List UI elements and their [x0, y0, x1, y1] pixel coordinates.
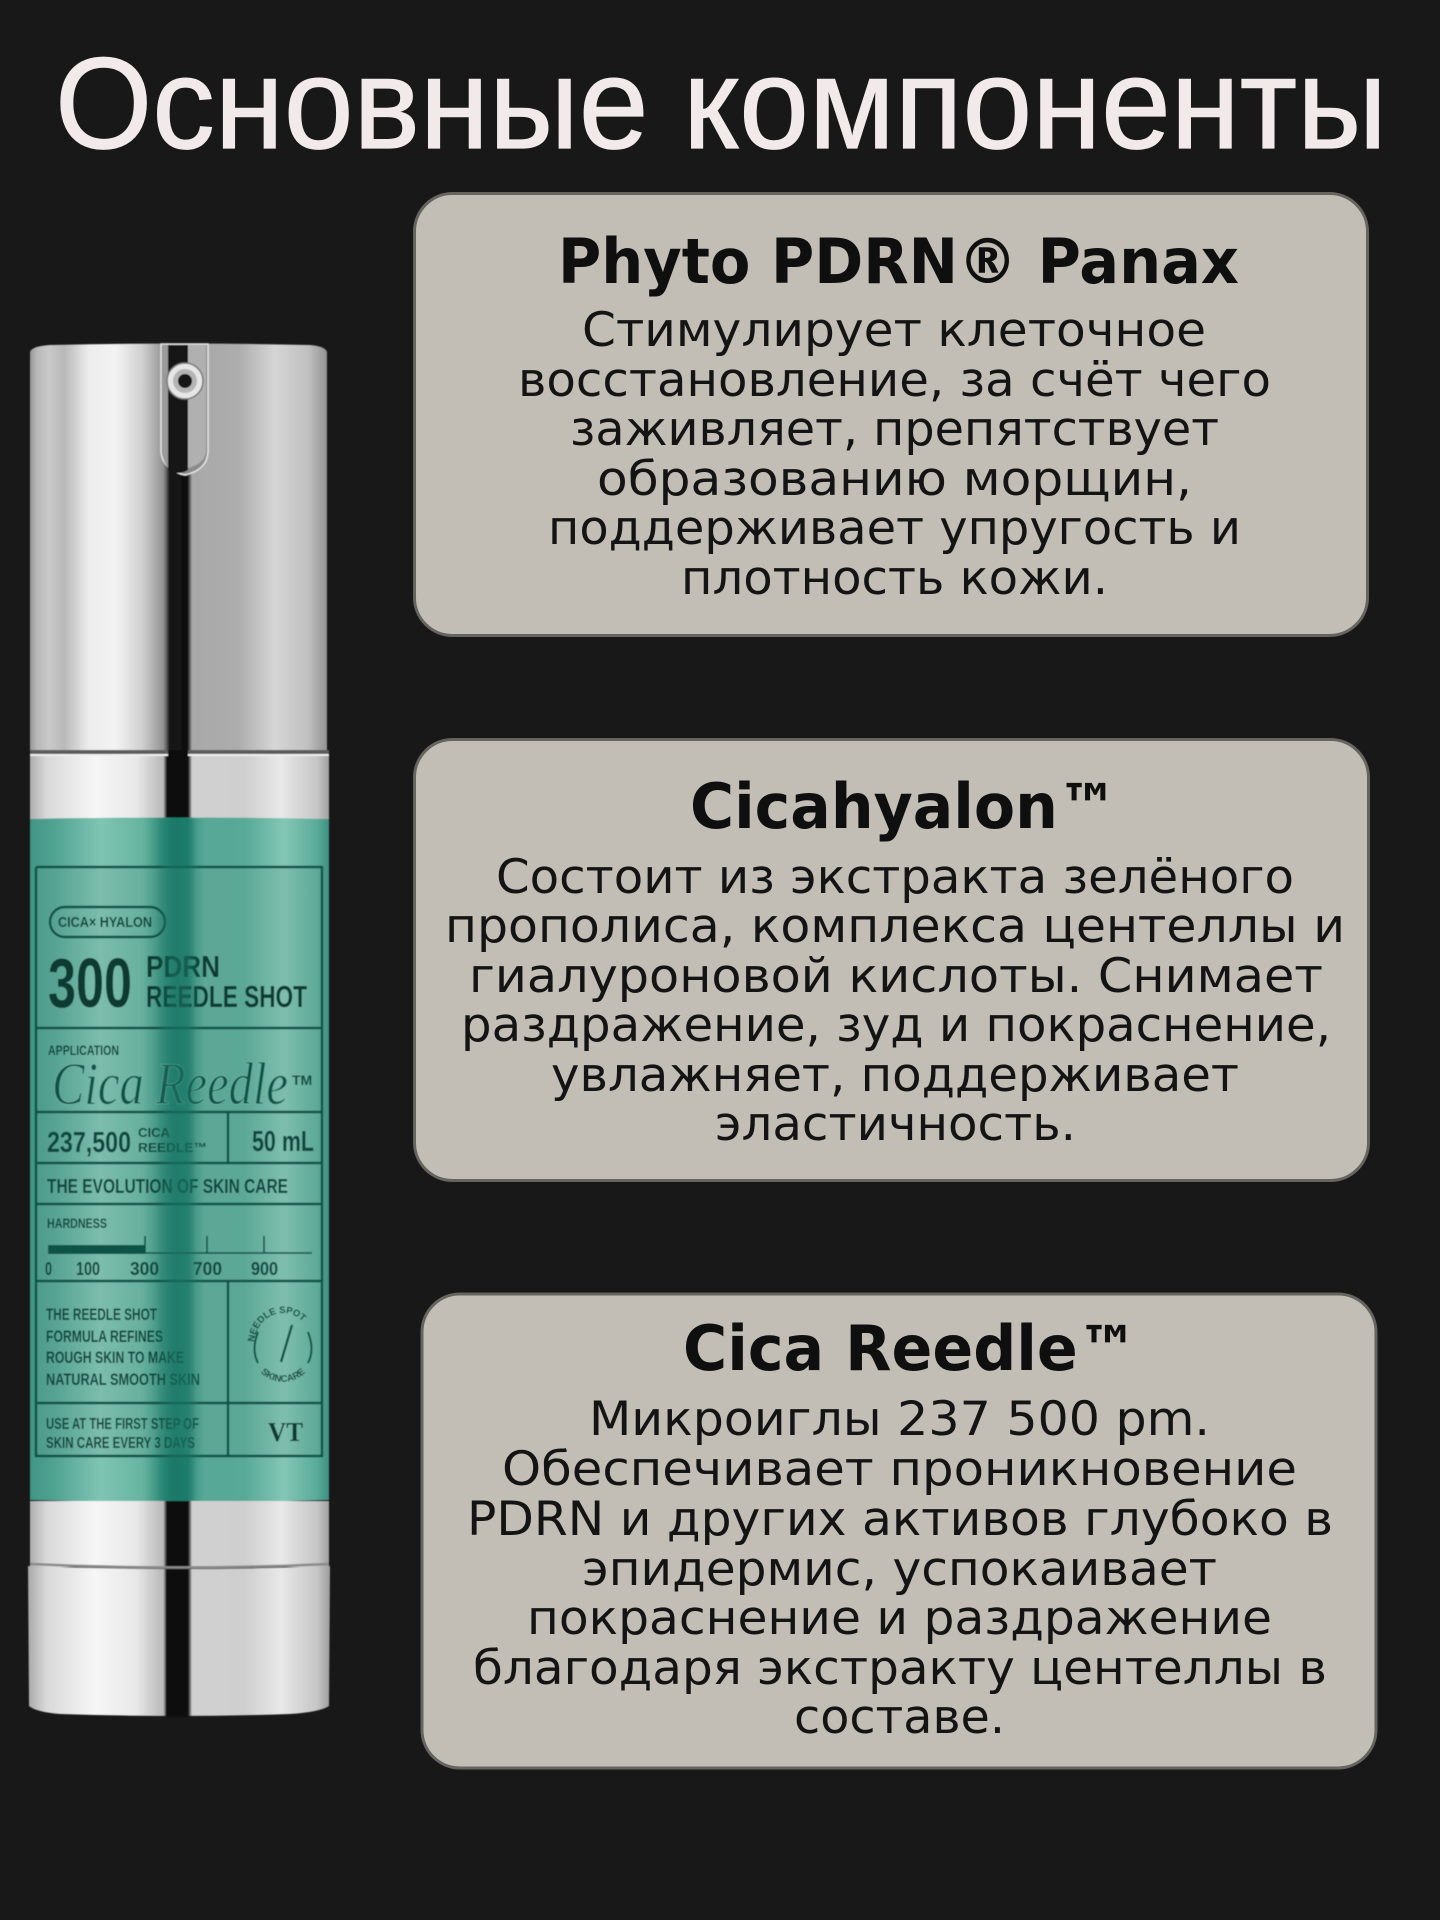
hardness scale: 100	[76, 1259, 100, 1279]
formula description: FORMULA REFINES	[46, 1327, 163, 1346]
pump nozzle	[167, 363, 203, 399]
usage note: SKIN CARE EVERY 3 DAYS	[46, 1435, 195, 1452]
formula description: THE REEDLE SHOT	[46, 1305, 157, 1324]
needle count and volume: CICA	[138, 1125, 171, 1140]
formula description: ROUGH SKIN TO MAKE	[46, 1348, 184, 1367]
needle count and volume: REEDLE™	[138, 1140, 207, 1155]
label grid	[36, 867, 322, 1456]
lower collar and base	[28, 1501, 330, 1717]
needle count and volume: 50 mL	[252, 1126, 314, 1158]
title: Основные компоненты	[55, 30, 1387, 176]
text block: Cicahyalon description: увлажняет, поддерживает	[551, 1048, 1239, 1103]
text block: Cica Reedle description: покраснение и раздражение	[527, 1591, 1272, 1646]
text block: Phyto PDRN description	[518, 303, 1271, 606]
text block: Cicahyalon description: прополиса, комплекса центеллы и	[445, 899, 1345, 954]
text block: Cicahyalon description: раздражение, зуд и покраснение,	[461, 998, 1331, 1053]
green label body	[29, 816, 330, 1502]
text block: Cica Reedle description	[467, 1392, 1333, 1745]
round badge: SKINCARE	[261, 1368, 306, 1382]
panel: Phyto PDRN Panax	[414, 194, 1368, 636]
heading: Cicahyalon: Cicahyalon™	[690, 770, 1118, 843]
application script: Cica Reedle	[52, 1051, 288, 1117]
product name	[48, 944, 307, 1022]
text block: Phyto PDRN description: поддерживает упругость и	[548, 501, 1241, 556]
text block: Cica Reedle description: благодаря экстракту центеллы в	[473, 1641, 1327, 1696]
hardness scale: 700	[193, 1259, 222, 1279]
hardness scale: 300	[130, 1259, 159, 1279]
text block: Cica Reedle description: эпидермис, успокаивает	[582, 1542, 1217, 1597]
text block: Cica Reedle description: составе.	[794, 1690, 1005, 1745]
text block: Phyto PDRN description: заживляет, препятствует	[570, 402, 1219, 457]
heading: Cica Reedle: Cica Reedle™	[683, 1312, 1138, 1385]
text block: Cica Reedle description: Микроиглы 237 500 pm.	[589, 1392, 1210, 1447]
product name: 300	[48, 944, 132, 1022]
slogan: THE EVOLUTION OF SKIN CARE	[47, 1176, 288, 1198]
product image: serum bottle	[27, 342, 331, 1717]
panel: Cicahyalon	[414, 740, 1368, 1180]
hardness scale	[45, 1215, 312, 1279]
hardness scale: 900	[251, 1259, 278, 1279]
usage note	[46, 1416, 199, 1452]
hardness scale: 0	[45, 1259, 52, 1279]
round badge	[247, 1306, 313, 1382]
text block: Cicahyalon description: эластичность.	[715, 1097, 1076, 1152]
round badge: NEEDLE SPOT	[247, 1306, 308, 1342]
upper collar	[30, 750, 329, 819]
text block: Phyto PDRN description: восстановление, за счёт чего	[518, 353, 1271, 408]
application script: APPLICATION	[48, 1042, 119, 1058]
product name: PDRN	[146, 949, 220, 984]
text block: Phyto PDRN description: плотность кожи.	[681, 551, 1108, 606]
needle count and volume: 237,500	[47, 1127, 131, 1159]
hardness scale: HARDNESS	[47, 1215, 107, 1231]
brand pill	[50, 907, 165, 937]
bottle cap	[30, 344, 327, 750]
formula description: NATURAL SMOOTH SKIN	[46, 1370, 200, 1389]
panel: Cica Reedle	[422, 1294, 1376, 1768]
usage note: USE AT THE FIRST STEP OF	[46, 1416, 199, 1433]
text block: Cicahyalon description: гиалуроновой кислоты. Снимает	[469, 949, 1323, 1004]
application script: TM	[292, 1072, 312, 1088]
text block: Cicahyalon description: Состоит из экстракта зелёного	[496, 850, 1294, 905]
text block: Phyto PDRN description: образованию морщин,	[597, 452, 1192, 507]
text block: Cica Reedle description: PDRN и других активов глубоко в	[467, 1492, 1333, 1547]
text block: Phyto PDRN description: Стимулирует клеточное	[582, 303, 1206, 358]
brand mark: VT	[268, 1417, 303, 1447]
brand pill: CICA× HYALON	[58, 914, 152, 931]
formula description	[46, 1305, 200, 1389]
product name: REEDLE SHOT	[146, 979, 307, 1014]
text block: Cicahyalon description	[445, 850, 1345, 1152]
needle count and volume	[47, 1125, 314, 1159]
text block: Cica Reedle description: Обеспечивает проникновение	[502, 1442, 1297, 1497]
heading: Phyto PDRN Panax: Phyto PDRN® Panax	[558, 225, 1239, 298]
